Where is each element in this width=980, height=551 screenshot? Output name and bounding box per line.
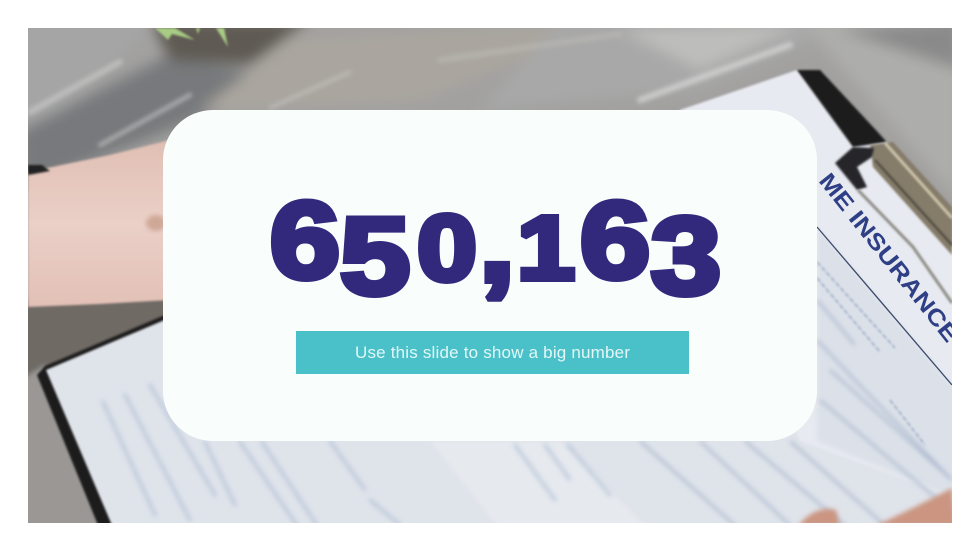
arm <box>28 140 170 307</box>
white rounded card <box>163 110 817 441</box>
upper form paper with title <box>640 70 964 530</box>
fingers <box>798 488 956 526</box>
big number: 6 <box>270 180 340 302</box>
form title text in photo: ME INSURANCE <box>814 168 964 347</box>
teal caption bar <box>296 331 689 374</box>
big number: 3 <box>651 196 721 318</box>
big number: 6 <box>580 180 650 302</box>
big number: 0 <box>417 196 477 300</box>
big number: 1 <box>517 197 575 298</box>
caption text: Use this slide to show a big number <box>355 343 630 362</box>
lower wood <box>28 299 163 523</box>
lower form paper <box>37 300 960 530</box>
big number: 5 <box>340 196 410 318</box>
big number: , <box>479 178 515 306</box>
clipboard clip <box>797 70 952 303</box>
plant leaves <box>155 28 228 47</box>
